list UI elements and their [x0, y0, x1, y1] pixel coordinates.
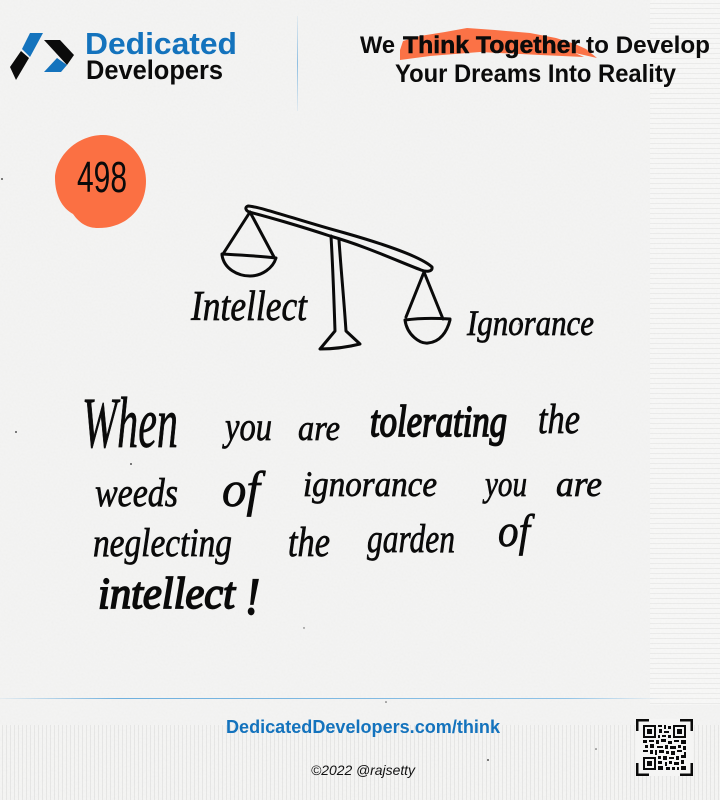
- label: Intellect: Intellect: [190, 284, 308, 330]
- header tagline: [360, 28, 710, 88]
- quote line 1: [82, 383, 580, 463]
- header divider: [297, 16, 298, 111]
- quote line 1: tolerating: [370, 397, 507, 446]
- logo wordmark: Dedicated: [85, 26, 237, 61]
- quote line 2: you: [483, 464, 527, 504]
- right pan: [405, 272, 450, 343]
- quote line 1: are: [298, 408, 340, 448]
- stand: [320, 236, 360, 349]
- quote line 3: garden: [367, 516, 455, 561]
- quote line 2: of: [222, 461, 266, 517]
- icon: Dedicated Developers mark: [10, 33, 74, 80]
- quote line 3: [93, 505, 536, 566]
- quote line 2: [95, 461, 602, 517]
- quote line 1: When: [82, 383, 178, 463]
- header tagline: to Develop: [586, 32, 710, 59]
- quote line 2: weeds: [95, 470, 178, 515]
- scale beam: [246, 206, 432, 271]
- quote line 3: neglecting: [93, 520, 232, 565]
- quote line 2: are: [556, 464, 602, 504]
- quote line 2: ignorance: [303, 464, 437, 504]
- orange badge with number: 498: [77, 153, 127, 202]
- footer rule: [0, 698, 665, 699]
- left pan: [222, 212, 276, 276]
- tagline line 2: Your Dreams Into Reality: [395, 60, 676, 88]
- quote line 1: the: [538, 397, 580, 443]
- orange badge with number: [55, 135, 146, 228]
- quote line 1: you: [222, 404, 272, 449]
- logo wordmark: Developers: [86, 55, 223, 85]
- footer link: DedicatedDevelopers.com/think: [226, 717, 501, 737]
- label: Ignorance: Ignorance: [466, 303, 594, 343]
- copyright: ©2022 @rajsetty: [311, 762, 416, 778]
- quote line 3: the: [288, 520, 330, 566]
- header tagline: Think Together: [403, 32, 580, 59]
- tagline line 1: We: [360, 32, 395, 59]
- brush stroke highlight: [400, 28, 597, 60]
- quote line 3: of: [498, 505, 536, 556]
- quote line 4: intellect: [98, 569, 237, 618]
- handwritten quote: [82, 383, 602, 626]
- quote line 4: !: [245, 569, 260, 626]
- header logo: [10, 26, 237, 85]
- icon: tilted balance scale: [222, 206, 450, 349]
- icon: QR code: [636, 719, 693, 776]
- logo wordmark: [85, 26, 237, 85]
